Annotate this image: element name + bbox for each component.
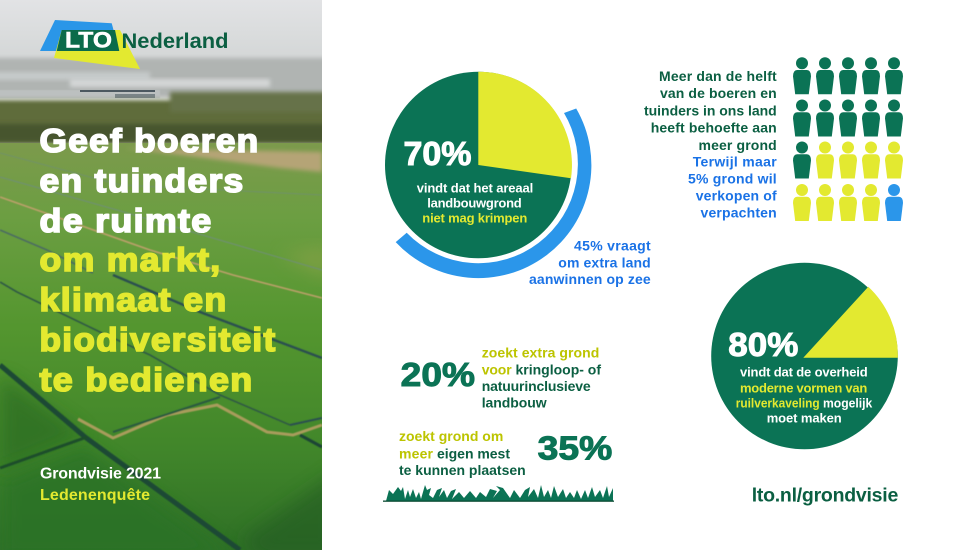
logo: LTO Nederland bbox=[40, 20, 228, 69]
text: more than half needs land: meer grond bbox=[698, 137, 777, 153]
illustration: grass strip bbox=[383, 485, 614, 502]
text: 45% callout: om extra land bbox=[558, 254, 651, 270]
chart: 80% pie: vindt dat de overheid bbox=[740, 365, 868, 380]
heading: main title: klimaat en bbox=[40, 281, 228, 318]
stat: 20%: 20% bbox=[401, 356, 475, 393]
text: subtitle Grondvisie 2021: Grondvisie 2021 bbox=[40, 466, 161, 482]
text: more than half needs land: 5% grond wil bbox=[688, 170, 777, 186]
stat: 20%: kringloop- of bbox=[516, 361, 601, 377]
heading: main title bbox=[40, 122, 276, 398]
chart: 70% pie with blue ring: 70% bbox=[404, 135, 472, 172]
heading: main title: om markt, bbox=[40, 241, 222, 278]
pictogram: 20 people bbox=[793, 57, 903, 221]
panel: aerial photo of farmland bbox=[0, 0, 342, 550]
chart: 80% pie: 80% bbox=[728, 326, 798, 363]
chart: 80% pie: mogelijk bbox=[823, 396, 873, 411]
chart: 70% pie with blue ring: niet mag krimpen bbox=[422, 211, 527, 226]
heading: main title: de ruimte bbox=[40, 202, 213, 239]
text: 45% callout: aanwinnen op zee bbox=[529, 271, 651, 287]
text: more than half needs land: Terwijl maar bbox=[693, 154, 777, 170]
stat: 35%: eigen mest bbox=[437, 445, 510, 461]
text: more than half needs land: Meer dan de helft bbox=[659, 68, 777, 84]
heading: main title: te bedienen bbox=[40, 361, 254, 398]
text: more than half needs land: tuinders in ons land bbox=[644, 102, 777, 118]
text: 45% callout bbox=[529, 238, 651, 287]
heading: main title: biodiversiteit bbox=[40, 321, 276, 358]
chart: 80% pie: moderne vormen van bbox=[740, 380, 867, 395]
logo: LTO Nederland: LTO bbox=[65, 28, 112, 52]
chart: 70% pie with blue ring bbox=[385, 72, 591, 278]
stat: 20% bbox=[401, 344, 601, 411]
stat: 20%: zoekt extra grond bbox=[482, 344, 599, 360]
chart: 70% pie with blue ring: landbouwgrond bbox=[427, 196, 522, 211]
heading: main title: Geef boeren bbox=[40, 122, 260, 159]
logo: LTO Nederland: Nederland bbox=[122, 30, 228, 53]
chart: 80% pie: ruilverkaveling bbox=[736, 396, 820, 411]
stat: 20%: natuurinclusieve bbox=[482, 378, 591, 394]
chart: 70% pie with blue ring: vindt dat het areaal bbox=[417, 180, 533, 195]
text: subtitle Grondvisie 2021 bbox=[40, 466, 161, 504]
stat: 35%: 35% bbox=[538, 429, 612, 466]
text: more than half needs land: heeft behoefte aan bbox=[651, 120, 777, 136]
link: lto.nl/grondvisie: lto.nl/grondvisie bbox=[752, 485, 898, 507]
text: subtitle Grondvisie 2021: Ledenenquête bbox=[40, 487, 150, 504]
stat: 20%: voor bbox=[482, 361, 512, 377]
stat: 35%: zoekt grond om bbox=[399, 428, 503, 444]
stat: 35%: te kunnen plaatsen bbox=[399, 462, 526, 478]
text: more than half needs land: van de boeren en bbox=[660, 85, 777, 101]
text: 45% callout: 45% vraagt bbox=[574, 238, 651, 254]
chart: 80% pie bbox=[711, 263, 898, 449]
heading: main title: en tuinders bbox=[40, 162, 245, 199]
chart: 80% pie: moet maken bbox=[767, 411, 842, 426]
stat: 35% bbox=[399, 428, 612, 478]
text: more than half needs land: verpachten bbox=[700, 204, 777, 220]
stat: 20%: landbouw bbox=[482, 395, 547, 411]
text: more than half needs land: verkopen of bbox=[696, 188, 777, 204]
stat: 35%: meer bbox=[399, 445, 434, 461]
text: more than half needs land bbox=[644, 68, 777, 220]
